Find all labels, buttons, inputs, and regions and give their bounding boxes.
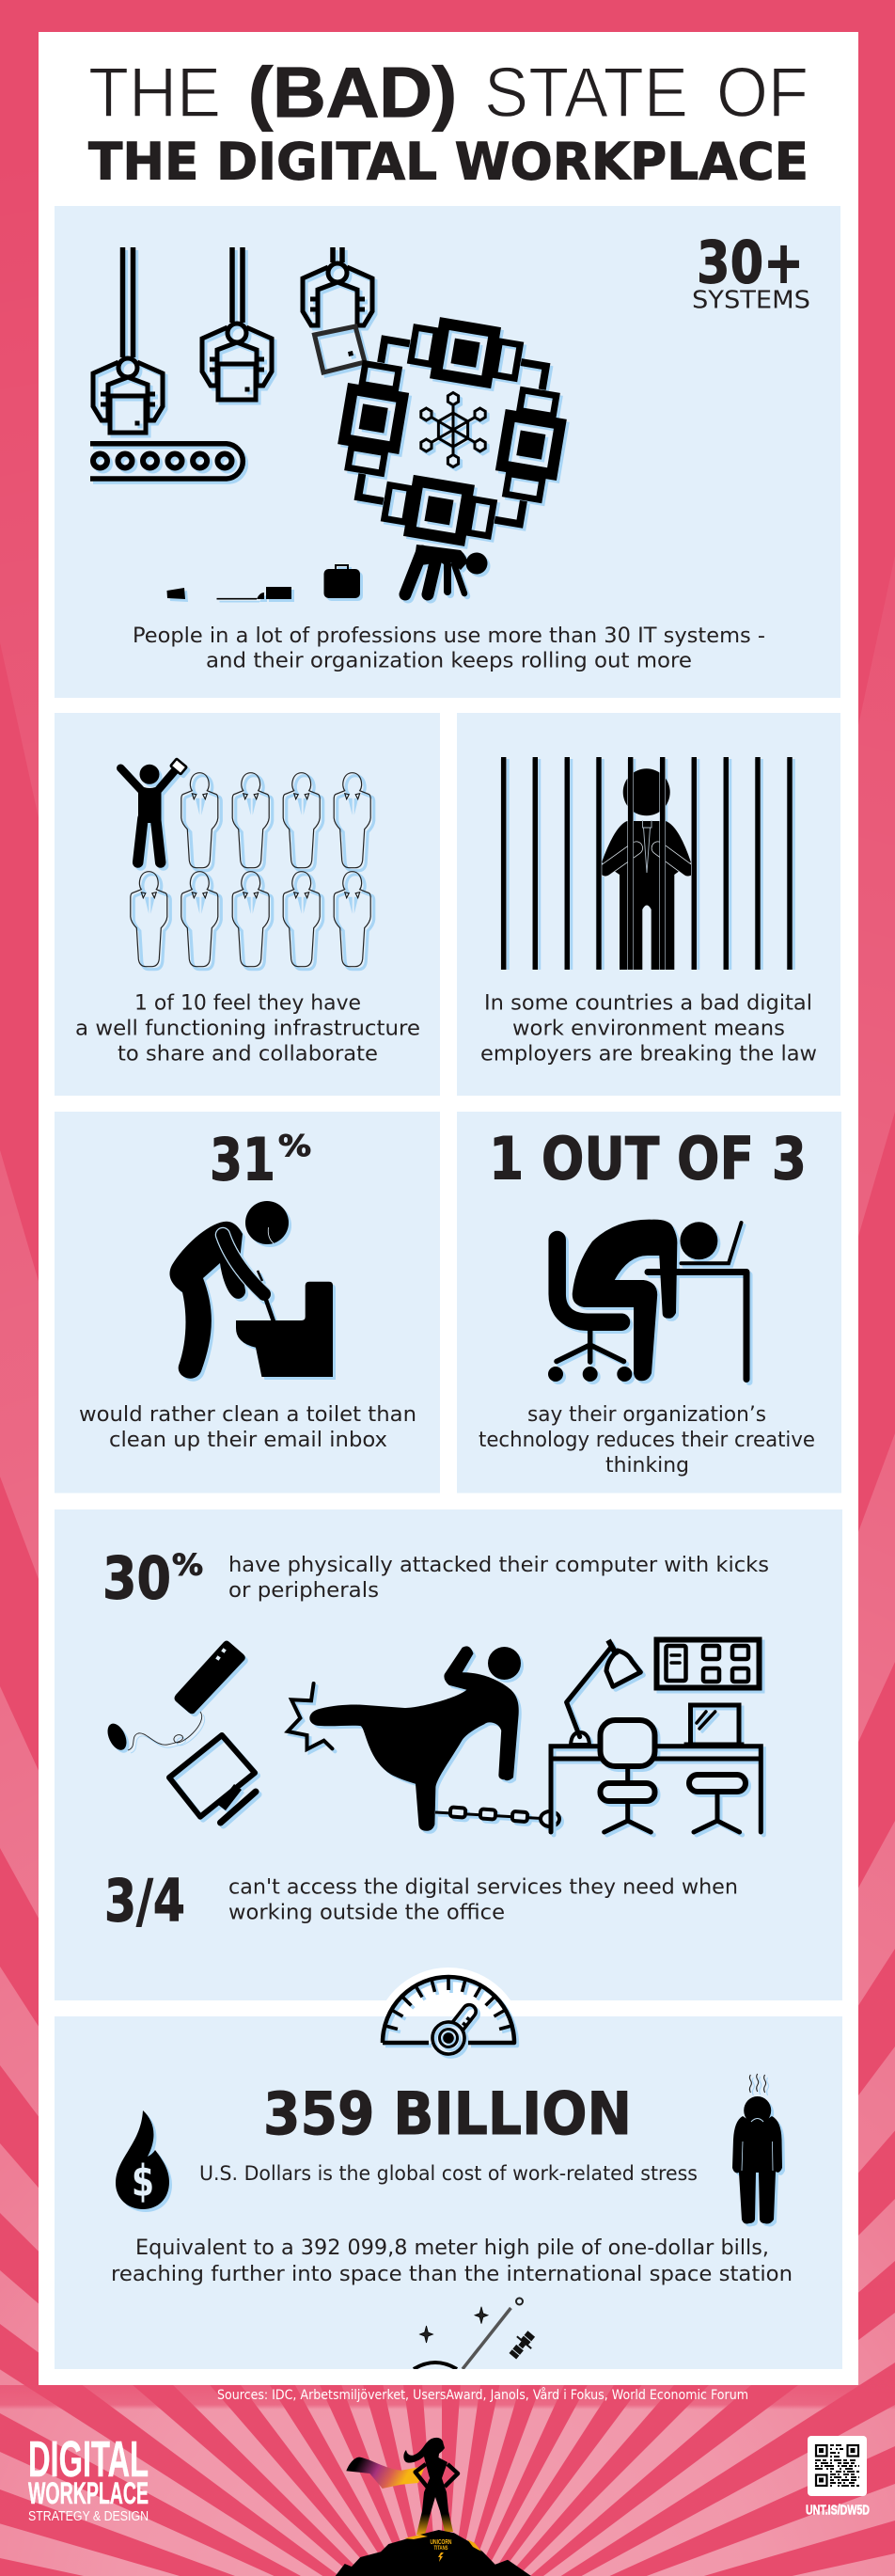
logo: digital workplace [28, 2431, 149, 2524]
title: STATE [484, 53, 688, 132]
text: outside the office: can't access the digital services they need when [228, 1875, 738, 1900]
logo: digital workplace: WORKPLACE [28, 2476, 149, 2510]
caption: systems: and their organization keeps rolling out more [206, 649, 692, 673]
caption: systems: People in a lot of professions use more than 30 IT systems - [133, 624, 765, 648]
panel: 1 of 10 [55, 713, 440, 1096]
title: (BAD) [248, 53, 457, 132]
icon: stressed person with steam [732, 2074, 782, 2223]
panel: 1 out of 3 [457, 1112, 841, 1493]
title: OF [716, 53, 809, 132]
text: attacked computer: or peripherals [228, 1579, 379, 1603]
stat: 31%: % [278, 1130, 311, 1163]
caption: 1 of 10 [75, 991, 420, 1067]
icon: gauge with thermometer [380, 1968, 519, 2059]
panel: 31 percent toilet [55, 1112, 440, 1493]
icon: space scene with satellite [414, 2299, 539, 2369]
stat: 30+ systems: SYSTEMS [692, 286, 810, 314]
text: pile of bills: reaching further into space than the international space station [111, 2263, 793, 2286]
hero on mountain: TITANS [434, 2546, 448, 2552]
caption: creative thinking: thinking [605, 1454, 689, 1478]
icon: person cleaning toilet [169, 1201, 333, 1379]
icon: robot claws on conveyor belt [90, 247, 372, 479]
text: pile of bills: Equivalent to a 392 099,8 meter high pile of one-dollar bills, [135, 2236, 769, 2260]
text: outside the office: working outside the office [228, 1902, 505, 1924]
caption: breaking the law: employers are breaking the law [480, 1042, 817, 1067]
caption: toilet [79, 1403, 416, 1452]
text: outside the office [228, 1875, 738, 1924]
icon: wheel of systems [331, 310, 573, 553]
stat: 1 out of 3: 1 OUT OF 3 [489, 1125, 807, 1193]
caption: toilet: clean up their email inbox [109, 1429, 387, 1452]
text: pile of bills [111, 2236, 793, 2286]
icon: slumped person at desk [548, 1220, 746, 1382]
title: THE DIGITAL WORKPLACE [88, 132, 809, 192]
panel: attacked computers and remote access [55, 1509, 842, 2000]
icon: person behind bars [504, 757, 793, 970]
text: cost of stress: U.S. Dollars is the global cost of work-related stress [199, 2162, 698, 2185]
title [88, 53, 809, 192]
caption: creative thinking: technology reduces their creative [479, 1429, 815, 1452]
stat: 30%: 30 [102, 1544, 171, 1612]
caption: breaking the law: work environment means [512, 1018, 785, 1040]
text: attacked computer: have physically attacked their computer with kicks [228, 1554, 769, 1577]
caption: creative thinking [479, 1403, 815, 1478]
stat: 31%: 31 [210, 1125, 275, 1194]
QR code [808, 2436, 867, 2496]
stat: 359 billion: 359 BILLION [263, 2079, 632, 2148]
logo: digital workplace: DIGITAL [28, 2431, 149, 2488]
caption: toilet: would rather clean a toilet than [79, 1403, 416, 1427]
icon: burning dollar [116, 2110, 169, 2209]
text: attacked computer [228, 1554, 769, 1603]
panel: breaking the law [457, 713, 840, 1096]
caption: breaking the law [480, 991, 817, 1067]
caption: 1 of 10: a well functioning infrastructure [75, 1018, 420, 1040]
hero on mountain: UNICORN [431, 2539, 451, 2546]
icon: crushed person and dropped items [167, 545, 487, 599]
stat: 30+ systems: 30+ [697, 228, 804, 297]
icon: burning dollar: $ [132, 2156, 154, 2206]
icon: office desk, chairs, laptop, lamp and board [551, 1640, 761, 1832]
sources: Sources: IDC, Arbetsmiljöverket, UsersAward, Janols, Vård i Fokus, World Economic Forum [217, 2387, 748, 2403]
stat: 30+ systems [692, 228, 810, 314]
panel: 359 billion [55, 2016, 842, 2369]
caption: breaking the law: In some countries a bad digital [484, 991, 812, 1016]
icon: one happy person among ten [120, 759, 374, 970]
logo: digital workplace: STRATEGY & DESIGN [28, 2509, 149, 2524]
caption: 1 of 10: 1 of 10 feel they have [134, 991, 361, 1016]
hero on mountain [336, 2438, 531, 2576]
stat: 3/4: 3/4 [104, 1866, 185, 1936]
caption: systems [133, 624, 765, 673]
QR short link: UNT.IS/DW5D [806, 2504, 870, 2519]
caption: 1 of 10: to share and collaborate [118, 1042, 378, 1067]
title: THE [88, 53, 221, 132]
caption: creative thinking: say their organization’s [527, 1403, 766, 1427]
icon: kicking person chained to desk [288, 1646, 559, 1831]
panel: 30+ systems [55, 206, 840, 698]
icon: scattered computer parts [103, 1640, 256, 1823]
stat: 30%: % [172, 1548, 203, 1582]
